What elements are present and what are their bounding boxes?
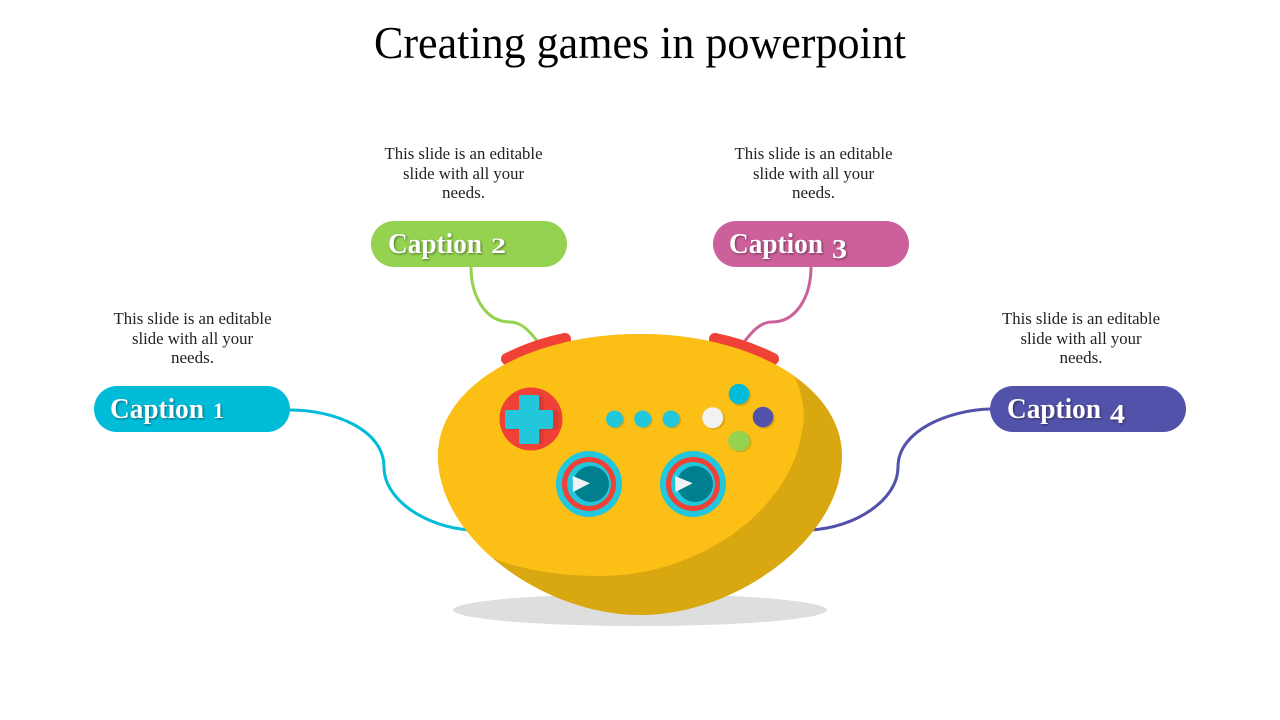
pill: caption 3 [713, 221, 909, 267]
controller shadow [453, 594, 827, 626]
pill label 4: 4 [1110, 399, 1125, 429]
text block 1: This slide is an editable [114, 309, 272, 328]
left joystick [556, 451, 622, 517]
pill label 3: 3 [832, 234, 847, 264]
pill: caption 1 [94, 386, 290, 432]
pill: caption 2 [371, 221, 567, 267]
right bumper [715, 339, 773, 359]
pill label 2: 2 [491, 233, 506, 258]
text block 4: This slide is an editable [1002, 309, 1160, 328]
connector: caption 1 to controller [290, 410, 470, 530]
text block 2: needs. [442, 183, 485, 202]
text block 4: slide with all your [1020, 329, 1142, 348]
pill label 1: 1 [213, 398, 224, 423]
text block 4: needs. [1060, 348, 1102, 367]
pill: caption 4 [990, 386, 1186, 432]
caption 2 group [371, 144, 567, 267]
pill label 2: Caption [388, 229, 482, 260]
text block 3: This slide is an editable [734, 144, 893, 163]
centre dots [606, 410, 681, 428]
caption 4 group [990, 309, 1186, 432]
pill label 3: Caption [729, 229, 823, 260]
text block 3: slide with all your [753, 164, 874, 183]
text block 1: needs. [171, 348, 214, 367]
connector: caption 3 to controller [744, 267, 811, 342]
controller body shade [438, 334, 842, 615]
text block 1: slide with all your [132, 329, 253, 348]
action buttons [702, 384, 775, 452]
d-pad [500, 388, 562, 450]
title: Creating games in powerpoint [374, 17, 906, 68]
pill label 4: Caption [1007, 394, 1101, 425]
controller body face [438, 334, 804, 576]
left bumper [507, 339, 565, 359]
caption 3 group [713, 144, 909, 267]
text block 2: slide with all your [403, 164, 524, 183]
pill label 1: Caption [110, 394, 204, 425]
caption 1 group [94, 309, 290, 432]
text block 2: This slide is an editable [384, 144, 543, 163]
right joystick [660, 451, 726, 517]
connector: caption 4 to controller [810, 409, 990, 530]
connector: caption 2 to controller [471, 267, 538, 342]
game controller [438, 333, 842, 615]
text block 3: needs. [792, 183, 835, 202]
